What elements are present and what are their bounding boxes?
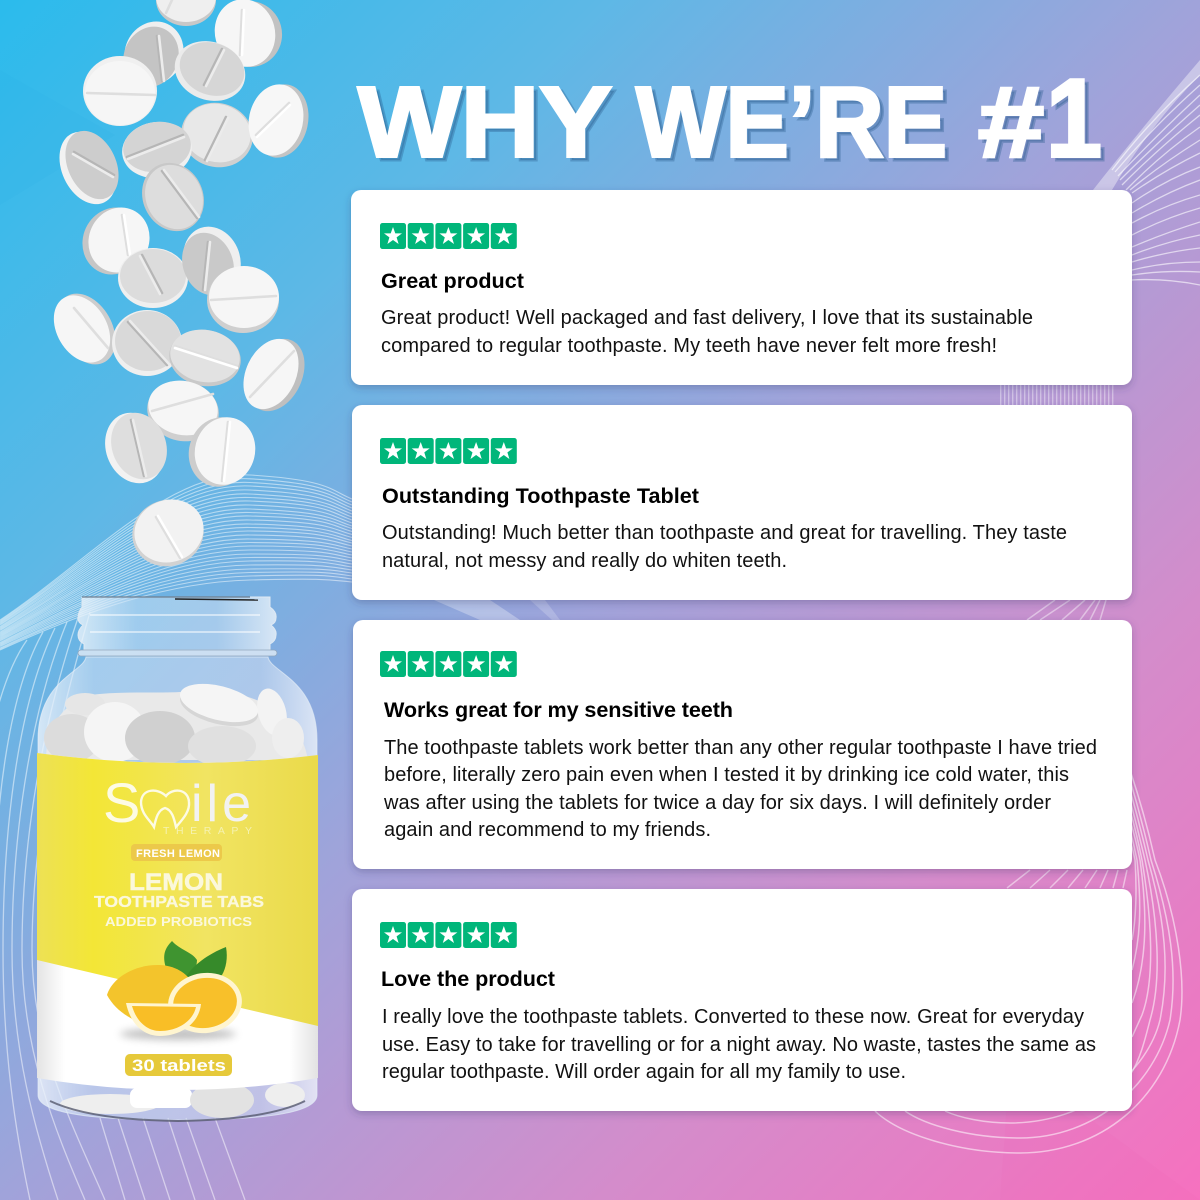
review text: The toothpaste tablets work better than any other regular toothpaste I have tried xyxy=(384,737,1097,759)
tablet 9 xyxy=(48,122,129,213)
logo: S xyxy=(103,771,140,834)
review text: Outstanding! Much better than toothpaste and great for travelling. They taste xyxy=(382,522,1067,544)
tablet 19 xyxy=(142,374,224,448)
tablet 15 xyxy=(42,283,128,375)
review heading: Great product xyxy=(381,268,524,293)
tablet 5 xyxy=(166,31,254,111)
review card 1 xyxy=(351,190,1132,385)
product name: LEMON xyxy=(129,869,223,896)
title: WE’RE xyxy=(640,70,951,182)
logo: ile xyxy=(191,775,251,833)
title: WE’RE xyxy=(636,66,947,178)
review text: regular toothpaste. Will order again for all my family to use. xyxy=(382,1061,906,1083)
title: 1 xyxy=(1050,60,1106,184)
tablets inside bottle xyxy=(44,677,308,1121)
title xyxy=(358,56,1106,184)
bottle label xyxy=(37,753,318,1090)
review text xyxy=(383,737,1097,841)
review heading: Works great for my sensitive teeth xyxy=(384,697,733,722)
tablet 1 xyxy=(156,0,216,26)
product name: ADDED PROBIOTICS xyxy=(105,914,252,929)
tablet 4 xyxy=(83,56,157,126)
title: WHY xyxy=(362,70,616,182)
tablet count tag: 30 tablets xyxy=(132,1056,226,1075)
review text: natural, not messy and really do whiten teeth. xyxy=(382,550,787,572)
title: # xyxy=(978,66,1044,178)
product bottle xyxy=(37,597,318,1121)
background ribbon: top right waves xyxy=(1093,60,1200,285)
five star rating xyxy=(380,223,517,249)
review text: compared to regular toothpaste. My teeth have never felt more fresh! xyxy=(381,335,997,357)
five star rating xyxy=(380,651,517,677)
tablet 3 xyxy=(113,12,194,97)
tablet 21 xyxy=(181,410,263,494)
bottle body glass xyxy=(38,657,317,1120)
tablet 8 xyxy=(118,117,196,183)
background lines: lower left arcs xyxy=(0,612,245,1200)
logo xyxy=(103,771,252,837)
five star rating xyxy=(380,922,517,948)
review heading: Outstanding Toothpaste Tablet xyxy=(382,483,699,508)
review card 2 xyxy=(352,405,1132,600)
logo: THERAPY xyxy=(163,825,252,837)
tablet 18 xyxy=(233,330,316,420)
review text xyxy=(381,307,1033,357)
tablet 20 xyxy=(95,404,176,492)
lemons illustration xyxy=(107,941,246,1040)
flavour tag xyxy=(131,844,222,861)
tablet 16 xyxy=(112,310,182,376)
falling toothpaste tablets xyxy=(42,0,316,576)
tablet 14 xyxy=(207,266,279,333)
review text xyxy=(382,522,1067,572)
tablet 11 xyxy=(72,197,160,285)
tablet 17 xyxy=(165,324,245,392)
five star rating xyxy=(380,438,517,464)
flavour tag: FRESH LEMON xyxy=(136,848,220,860)
review text: I really love the toothpaste tablets. Converted to these now. Great for everyday xyxy=(382,1006,1084,1028)
tablet 12 xyxy=(118,248,188,308)
review text: was after using the tablets for twice a day for six days. I will definitely order xyxy=(383,792,1051,814)
review text: Great product! Well packaged and fast delivery, I love that its sustainable xyxy=(381,307,1033,329)
tablet 2 xyxy=(207,0,289,74)
review card 4 xyxy=(352,889,1132,1111)
product name xyxy=(94,869,264,929)
tablet 13 xyxy=(174,218,250,303)
background ribbon: left waves xyxy=(0,475,352,650)
review text: again and recommend to my friends. xyxy=(384,819,711,841)
review text xyxy=(382,1006,1096,1083)
bottle neck xyxy=(78,597,277,656)
tablet count tag xyxy=(125,1054,232,1076)
review heading: Love the product xyxy=(381,966,555,991)
review text: use. Easy to take for travelling or for a night away. No waste, tastes the same as xyxy=(382,1034,1096,1056)
tablet 6 xyxy=(174,95,260,175)
title: WHY xyxy=(358,66,612,178)
tablet 22 xyxy=(123,490,213,576)
tablet 10 xyxy=(131,153,215,241)
product name: TOOTHPASTE TABS xyxy=(94,894,264,911)
review text: before, literally zero pain even when I tested it by drinking ice cold water, this xyxy=(384,764,1069,786)
review card 3 xyxy=(353,620,1132,869)
background lines: lower right arcs xyxy=(434,395,1182,1153)
title: # xyxy=(982,70,1048,182)
title: 1 xyxy=(1046,56,1102,180)
tablet 7 xyxy=(242,79,315,163)
